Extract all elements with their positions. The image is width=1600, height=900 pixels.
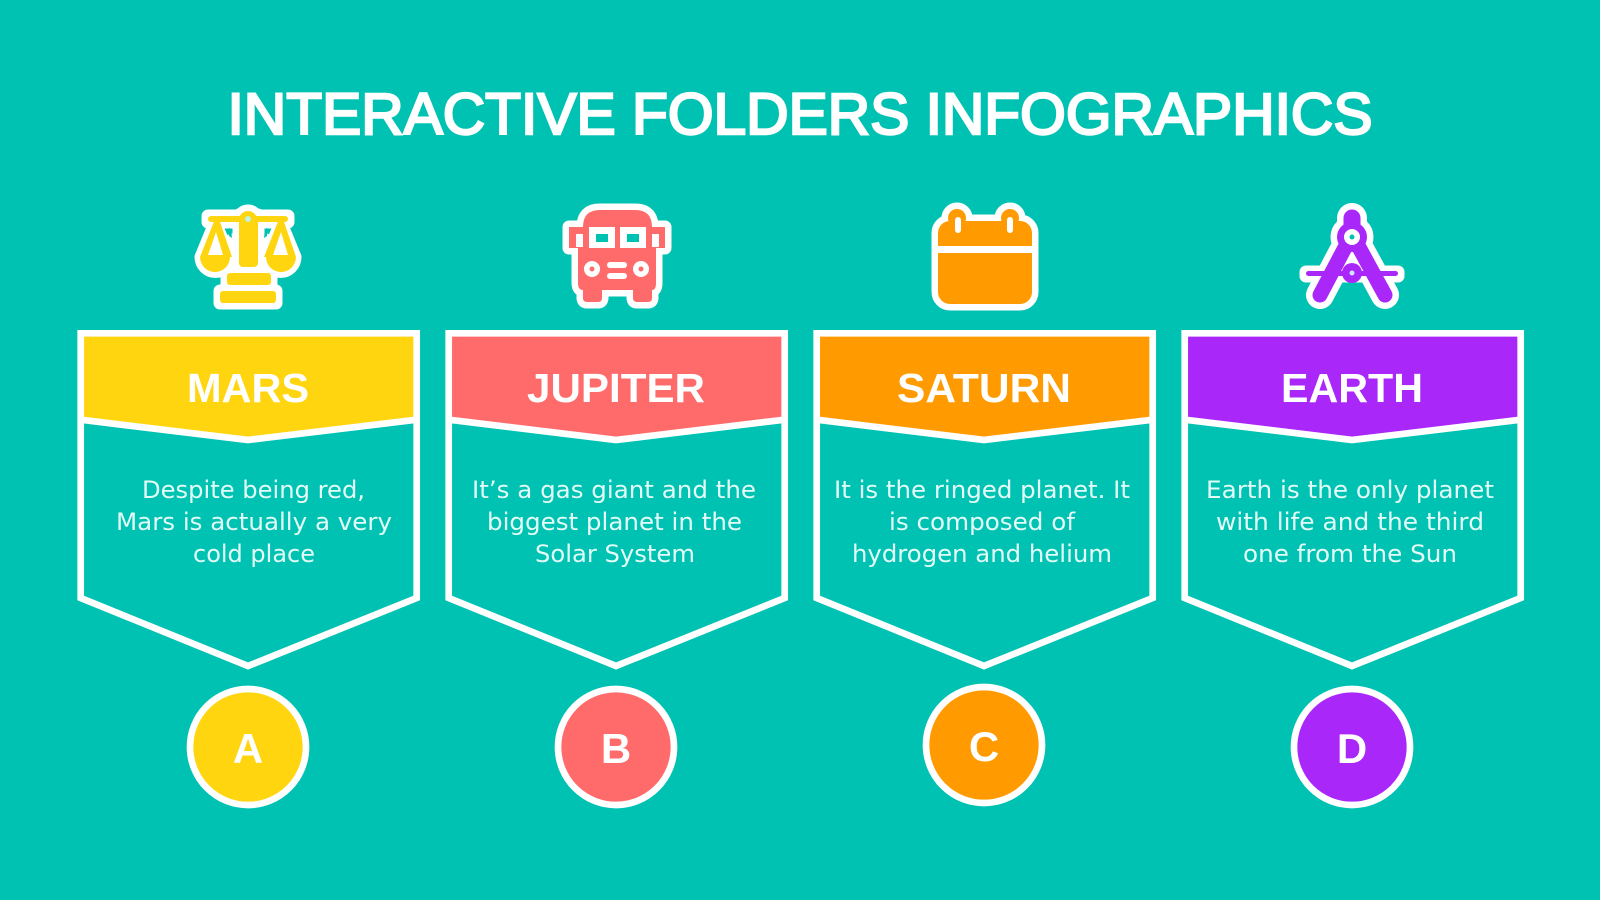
text: Mars description: cold place: [193, 540, 315, 568]
text: Earth description: with life and the third: [1216, 508, 1484, 536]
badge: A: [190, 689, 306, 805]
badge: C: [926, 687, 1042, 803]
badge: D: D: [1337, 725, 1367, 772]
icon: calendar: [938, 209, 1032, 304]
text: Jupiter description: Solar System: [535, 540, 695, 568]
title: INTERACTIVE FOLDERS INFOGRAPHICS: [228, 82, 1372, 147]
panel: Saturn: [817, 333, 1153, 666]
heading: Earth: EARTH: [1281, 365, 1423, 411]
icon: scales: [200, 211, 296, 303]
text: Earth description: [1206, 476, 1494, 568]
icon: bus: [569, 210, 665, 302]
heading: Mars: MARS: [187, 365, 309, 411]
text: Saturn description: It is the ringed planet. It: [834, 476, 1130, 504]
badge: A: A: [233, 725, 263, 772]
text: Saturn description: is composed of: [889, 508, 1076, 536]
badge: C: C: [969, 723, 999, 770]
panel: Mars: [81, 333, 417, 666]
heading: Saturn: SATURN: [897, 365, 1071, 411]
heading: Jupiter: JUPITER: [527, 365, 705, 411]
text: Jupiter description: biggest planet in the: [487, 508, 742, 536]
text: Jupiter description: [472, 476, 756, 568]
panel: Jupiter: [449, 333, 785, 666]
text: Mars description: Despite being red,: [142, 476, 365, 504]
text: Jupiter description: It’s a gas giant and the: [472, 476, 756, 504]
text: Mars description: Mars is actually a very: [116, 508, 392, 536]
panel: Earth: [1185, 333, 1521, 666]
icon: compass: [1306, 218, 1398, 295]
text: Mars description: [116, 476, 392, 568]
badge: B: [558, 689, 674, 805]
badge: D: [1294, 689, 1410, 805]
badge: B: B: [601, 725, 631, 772]
text: Saturn description: [834, 476, 1130, 568]
text: Earth description: one from the Sun: [1243, 540, 1457, 568]
text: Earth description: Earth is the only planet: [1206, 476, 1494, 504]
text: Saturn description: hydrogen and helium: [852, 540, 1112, 568]
